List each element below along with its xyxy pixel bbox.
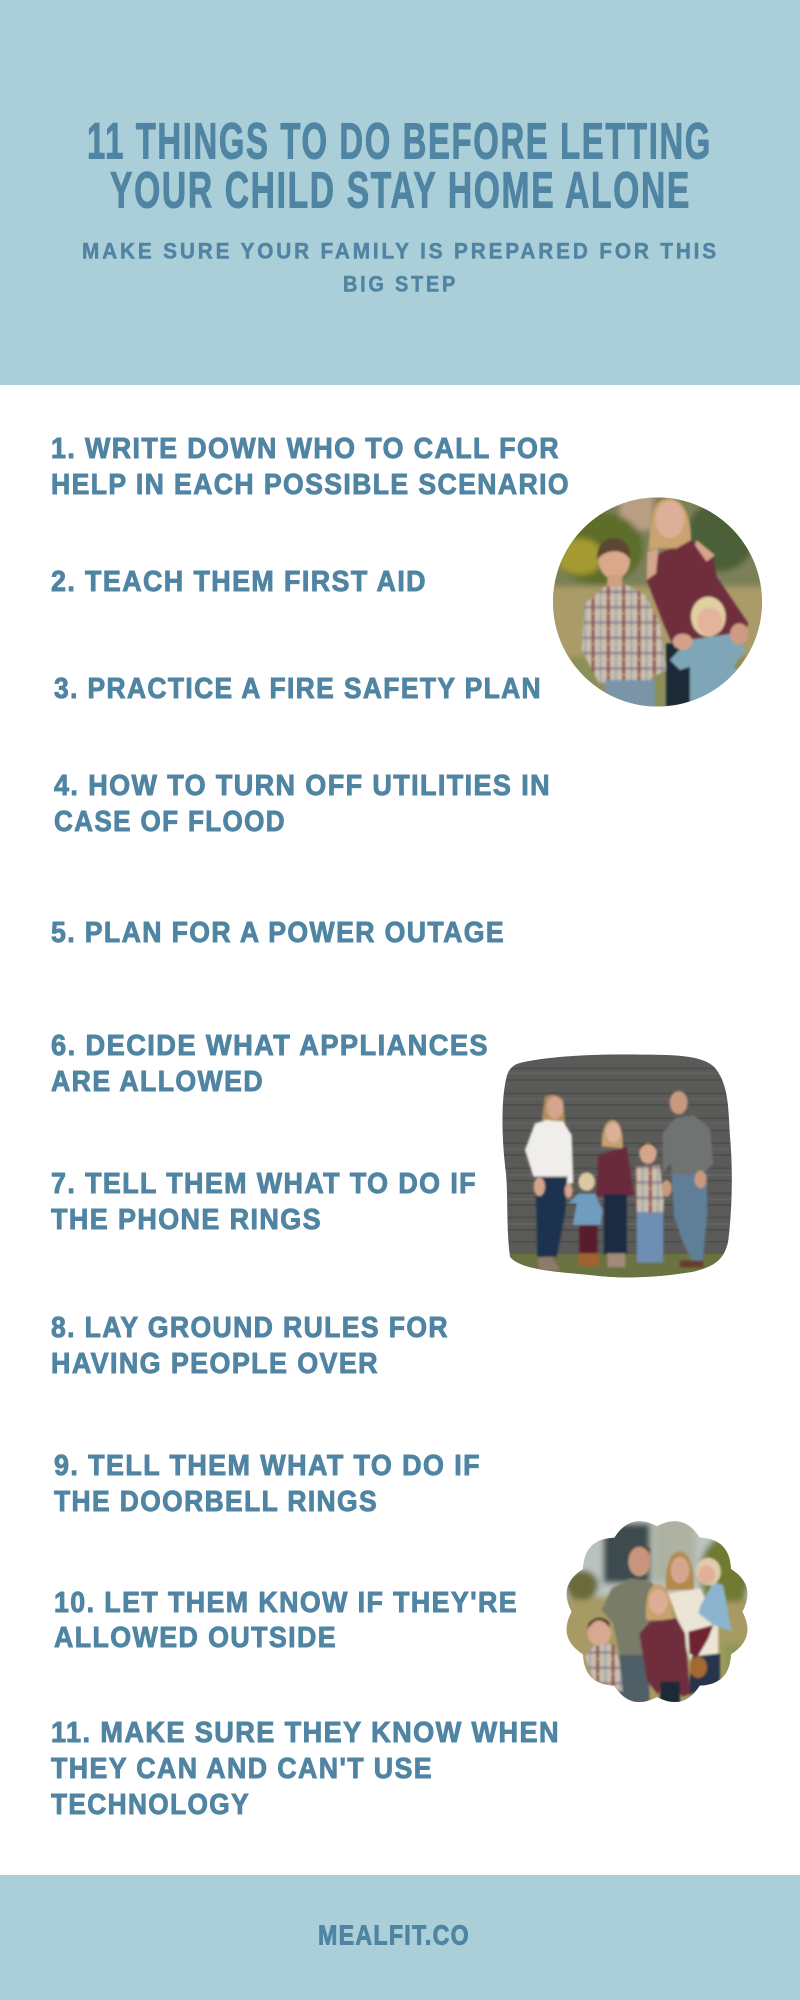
item 9: THE DOORBELL RINGS xyxy=(54,1486,378,1518)
item 2: 2. TEACH THEM FIRST AID xyxy=(51,566,427,598)
item 5: 5. PLAN FOR A POWER OUTAGE xyxy=(51,917,505,949)
item 6: ARE ALLOWED xyxy=(51,1066,264,1098)
item 4 xyxy=(54,770,551,838)
photo: family portrait in scalloped frame xyxy=(566,1521,748,1702)
item 7 xyxy=(51,1168,477,1236)
item 7: THE PHONE RINGS xyxy=(51,1204,322,1236)
item 4: CASE OF FLOOD xyxy=(54,806,286,838)
item 11: 11. MAKE SURE THEY KNOW WHEN xyxy=(51,1717,560,1749)
girl xyxy=(602,1120,623,1148)
item 10 xyxy=(54,1587,518,1654)
photo: three children in circle xyxy=(550,493,767,710)
item 8: HAVING PEOPLE OVER xyxy=(51,1348,379,1380)
item 1 xyxy=(51,433,570,501)
father xyxy=(670,1091,688,1114)
footer text: website: MEALFIT.CO xyxy=(318,1920,470,1950)
subtitle: BIG STEP xyxy=(343,272,458,296)
item 1: 1. WRITE DOWN WHO TO CALL FOR xyxy=(51,433,560,465)
item 11 xyxy=(51,1717,560,1821)
item 3: 3. PRACTICE A FIRE SAFETY PLAN xyxy=(54,673,542,705)
item 10: ALLOWED OUTSIDE xyxy=(54,1622,337,1654)
item 1: HELP IN EACH POSSIBLE SCENARIO xyxy=(51,469,570,501)
boy xyxy=(587,1619,611,1646)
title xyxy=(87,112,712,218)
item 6: 6. DECIDE WHAT APPLIANCES xyxy=(51,1030,489,1062)
boy xyxy=(582,585,666,685)
girl xyxy=(646,1584,673,1620)
boy xyxy=(639,1143,657,1164)
item 11: THEY CAN AND CAN'T USE xyxy=(51,1753,433,1785)
father xyxy=(628,1547,651,1577)
item 7: 7. TELL THEM WHAT TO DO IF xyxy=(51,1168,477,1200)
subtitle xyxy=(82,238,719,296)
item 8 xyxy=(51,1312,449,1380)
item 9 xyxy=(54,1450,481,1518)
girl xyxy=(647,540,748,647)
item 6 xyxy=(51,1030,489,1098)
item 11: TECHNOLOGY xyxy=(51,1789,250,1821)
item 4: 4. HOW TO TURN OFF UTILITIES IN xyxy=(54,770,551,802)
mother xyxy=(542,1095,565,1123)
mother xyxy=(666,1552,694,1590)
header panel xyxy=(0,0,800,385)
toddler xyxy=(698,1582,732,1632)
subtitle: MAKE SURE YOUR FAMILY IS PREPARED FOR THIS xyxy=(82,238,719,264)
toddler xyxy=(578,1172,595,1191)
footer panel xyxy=(0,1875,800,2000)
item 9: 9. TELL THEM WHAT TO DO IF xyxy=(54,1450,481,1482)
item 10: 10. LET THEM KNOW IF THEY'RE xyxy=(54,1587,518,1619)
photo: family against barn wall xyxy=(497,1050,740,1284)
item 8: 8. LAY GROUND RULES FOR xyxy=(51,1312,449,1344)
toddler xyxy=(670,634,747,703)
